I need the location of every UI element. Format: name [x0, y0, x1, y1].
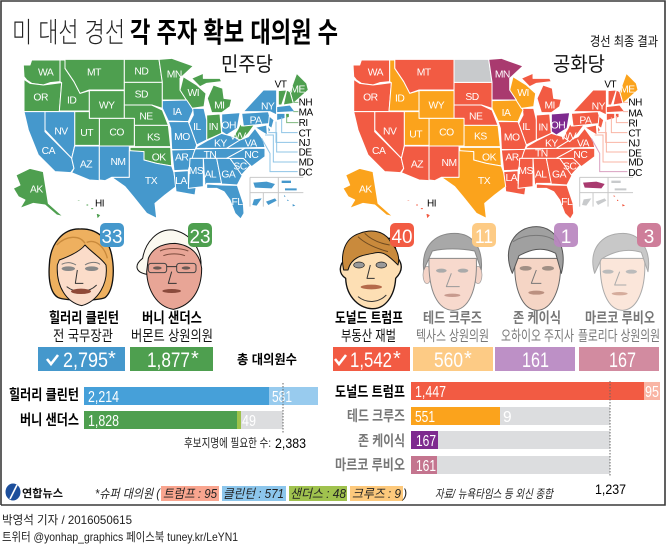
map: Democratic party: DE: [299, 148, 312, 159]
map: Democratic party: OK: [152, 153, 166, 164]
portrait: John Kasich: [508, 227, 563, 310]
map: Democratic party: AZ: [80, 159, 92, 170]
map: Democratic party: MS: [189, 166, 204, 177]
map: Republican party: MN: [495, 70, 510, 81]
bar chart: Democrats: 49: [242, 413, 256, 430]
legend: super delegates: 크루즈 : 9: [352, 487, 401, 501]
candidate names: 버니 샌더스: [142, 310, 202, 327]
title: [12, 17, 338, 48]
bar chart: Democrats: 2,383: [275, 436, 306, 451]
map: Democratic party: MO: [174, 132, 190, 143]
map: Republican party: [343, 58, 643, 219]
map: Democratic party: VT: [275, 79, 287, 90]
map: Republican party: VT: [604, 79, 617, 90]
bar chart: Republicans: 테드 크루즈: [347, 408, 405, 425]
map: Democratic party: MA: [299, 107, 313, 118]
bar chart: Democrats: 1,828: [88, 413, 119, 430]
map: Democratic party: IL: [193, 122, 202, 133]
label: total delegates: 총 대의원수: [237, 352, 297, 367]
map: Republican party: CT: [628, 129, 641, 140]
portrait: Marco Rubio: [593, 233, 649, 310]
map: Republican party: NE: [469, 111, 483, 122]
map: Republican party: SC: [563, 161, 577, 172]
legend: super delegates: *슈퍼 대의원 (: [95, 487, 162, 501]
map: Republican party: NM: [442, 158, 457, 169]
map: Republican party: AL: [535, 169, 547, 180]
bar chart: Republicans: 1,237: [595, 481, 626, 497]
map: Republican party: NH: [628, 98, 642, 109]
map: Democratic party: ME: [290, 85, 306, 96]
portrait: Hillary Clinton: [49, 229, 113, 306]
legend: super delegates: [95, 486, 407, 501]
map: Democratic party: NV: [54, 126, 68, 137]
map: Republican party: WY: [429, 100, 445, 111]
map: Democratic party: DC: [299, 167, 312, 178]
map: Republican party: RI: [628, 119, 637, 130]
map: Democratic party: VA: [245, 139, 257, 150]
map: Republican party: UT: [409, 130, 423, 141]
map: Democratic party: WV: [230, 131, 246, 142]
map: Republican party: ME: [620, 85, 635, 96]
map: Democratic party: CA: [42, 146, 56, 157]
total delegates: Clinton: *: [108, 348, 116, 370]
map: Democratic party: AK: [30, 185, 43, 196]
map: Republican party: MA: [628, 108, 643, 119]
total delegates: Clinton: 2,795: [63, 348, 108, 372]
map: Democratic party: NE: [139, 111, 153, 122]
map: Republican party: AK: [359, 185, 372, 196]
candidate names: 텍사스 상원의원: [416, 328, 489, 345]
map: Democratic party: KY: [214, 139, 227, 150]
badge: Clinton 33: 33: [102, 227, 122, 248]
map: Democratic party: CO: [109, 128, 124, 139]
map: Democratic party: ND: [134, 67, 148, 78]
bar chart: Republicans: 존 케이식: [358, 433, 405, 450]
map: Democratic party: MI: [214, 101, 225, 112]
map: Republican party: LA: [506, 173, 518, 184]
map: Democratic party: NM: [110, 157, 126, 168]
map: Democratic party: NJ: [299, 138, 310, 149]
map: Democratic party: AL: [205, 169, 217, 180]
map: Republican party: WI: [517, 88, 529, 99]
candidate names: 오하이오 주지사: [501, 328, 574, 345]
map: Republican party: NV: [383, 126, 397, 137]
candidate names: 부동산 재벌: [341, 328, 396, 345]
portrait: Donald Trump: [340, 231, 401, 309]
bar chart: Republicans: 167: [416, 433, 436, 450]
map: Democratic party: TN: [204, 150, 216, 161]
candidate names: [49, 310, 660, 345]
bar chart: Republicans: 마르코 루비오: [335, 457, 405, 474]
map: Republican party: OR: [363, 93, 378, 104]
bar chart: Republicans: 9: [503, 409, 512, 426]
badge: Sanders 23: 23: [190, 227, 210, 248]
map: Republican party: PA: [579, 115, 592, 126]
title: 미 대선 경선: [12, 17, 125, 48]
map: Democratic party: WI: [188, 88, 199, 99]
map: Republican party: IN: [538, 123, 548, 134]
map: Republican party: VA: [577, 139, 590, 150]
badge: Kasich 1: 1: [561, 227, 571, 248]
credit: 박영석 기자 / 2016050615: [2, 513, 132, 527]
bar chart: Democrats: 2,214: [88, 389, 119, 406]
heading: Democrats: 민주당: [221, 53, 273, 76]
map: Democratic party: CT: [299, 128, 311, 139]
heading: Republicans: 공화당: [553, 53, 605, 76]
map: Republican party: MI: [544, 101, 555, 112]
total delegates: Rubio: 167: [609, 348, 636, 372]
legend: super delegates: 클린턴 : 571: [223, 487, 284, 501]
badge: Cruz 11: 11: [475, 227, 493, 248]
map: Republican party: NJ: [628, 139, 640, 150]
bar chart: Democrats: 버니 샌더스: [20, 412, 79, 429]
map: Democratic party: KS: [147, 133, 160, 144]
legend: super delegates: 트럼프 : 95: [163, 487, 217, 501]
legend: super delegates: 샌더스 : 48: [290, 487, 346, 501]
candidate names: 존 케이식: [513, 310, 561, 327]
total delegates: Cruz: [413, 347, 493, 372]
map: Republican party: IL: [522, 122, 531, 133]
source: 자료/ 뉴욕타임스 등 외신 종합: [435, 487, 555, 501]
map: Republican party: WV: [561, 131, 577, 142]
map: Republican party: DC: [628, 168, 642, 179]
portrait: Bernie Sanders: [137, 230, 202, 309]
badge: Rubio 3: 3: [644, 227, 654, 248]
map: Republican party: TX: [478, 176, 491, 187]
bar chart: Republicans: 1,447: [415, 384, 446, 401]
total delegates: Rubio: [579, 347, 659, 372]
map: Republican party: IA: [502, 108, 511, 119]
total delegates: Sanders: 1,877: [147, 348, 190, 372]
map: Republican party: CO: [439, 128, 454, 139]
title: 각 주자 확보 대의원 수: [130, 17, 338, 48]
candidate names: 테드 크루즈: [423, 310, 482, 327]
map: Republican party: HI: [427, 198, 436, 209]
bar chart: Republicans: 도널드 트럼프: [335, 384, 405, 401]
map: Republican party: NY: [592, 101, 606, 112]
map: Republican party: KY: [545, 139, 558, 150]
map: Democratic party: [13, 58, 313, 219]
credit: [2, 513, 238, 544]
map: Democratic party: GA: [221, 170, 236, 181]
map: Democratic party: MT: [87, 68, 102, 79]
map: Republican party: CA: [372, 146, 386, 157]
map: Democratic party: PA: [250, 115, 262, 126]
map: Republican party: MT: [417, 68, 432, 79]
total delegates: Kasich: [495, 347, 575, 372]
total delegates: Trump: 1,542: [350, 348, 392, 372]
map: Republican party: WA: [368, 68, 384, 79]
map: Democratic party: IN: [209, 122, 218, 133]
map: Democratic party: LA: [175, 176, 187, 187]
map: Democratic party: WY: [99, 100, 115, 111]
total delegates: Kasich: 161: [522, 348, 549, 372]
total delegates: Trump: *: [393, 348, 401, 370]
map: Democratic party: NY: [261, 101, 275, 112]
map: Republican party: FL: [561, 197, 573, 208]
map: Republican party: NC: [573, 150, 588, 161]
bar chart: Republicans: 551: [415, 409, 435, 426]
map: Democratic party: TX: [145, 176, 158, 187]
map: Democratic party: UT: [80, 128, 94, 139]
map: Democratic party: FL: [231, 197, 243, 208]
map: Democratic party: MD: [299, 158, 313, 169]
map: Democratic party: ID: [67, 95, 76, 106]
map: Republican party: OH: [551, 120, 565, 131]
bar chart: Republicans: 95: [645, 384, 659, 401]
bar chart: Democrats: 힐러리 클린턴: [9, 387, 79, 404]
map: Democratic party: MN: [167, 70, 182, 81]
map: Republican party: MO: [504, 133, 520, 144]
badge: Cruz 11: [472, 223, 496, 248]
map: Republican party: AZ: [411, 159, 423, 170]
candidate names: 전 국무장관: [53, 328, 113, 345]
map: Democratic party: SD: [135, 89, 148, 100]
portrait: Ted Cruz: [423, 233, 482, 310]
logo: Yonhap News: [6, 484, 63, 500]
total delegates: Sanders: [130, 347, 213, 372]
logo: Yonhap News: 연합뉴스: [22, 486, 63, 500]
map: Democratic party: OR: [33, 93, 48, 104]
total delegates: Cruz: *: [464, 348, 472, 370]
bar chart: Republicans: 161: [416, 458, 436, 475]
map: Republican party: OK: [482, 153, 497, 164]
map: Democratic party: RI: [299, 118, 308, 129]
badge: Kasich 1: [554, 223, 578, 248]
candidate names: 버몬트 상원의원: [131, 328, 213, 345]
map: Republican party: AR: [505, 153, 519, 164]
total delegates: Clinton: [38, 347, 125, 372]
badge: Trump 40: 40: [392, 227, 412, 248]
map: Democratic party: HI: [95, 198, 104, 209]
map: Democratic party: OH: [221, 120, 236, 131]
total delegates: Cruz: 560: [434, 348, 463, 372]
bar chart: Republicans: [335, 381, 660, 497]
candidate names: 도널드 트럼프: [335, 310, 403, 327]
map: Republican party: KS: [474, 131, 487, 142]
map: Democratic party: NH: [299, 98, 312, 109]
total delegates: Sanders: *: [191, 348, 199, 370]
map: Republican party: MD: [628, 158, 643, 169]
map: Republican party: GA: [552, 170, 567, 181]
candidate names: 힐러리 클린턴: [49, 310, 119, 327]
bar chart: Democrats: [9, 383, 318, 451]
bar chart: Democrats: 581: [272, 389, 292, 406]
map: Republican party: MS: [518, 166, 534, 177]
credit: 트위터 @yonhap_graphics 페이스북 tuney.kr/LeYN1: [2, 530, 238, 544]
map: Democratic party: SC: [233, 161, 248, 172]
map: Republican party: DE: [628, 149, 642, 160]
badge: Rubio 3: [637, 223, 661, 248]
map: Democratic party: WA: [38, 68, 54, 79]
total delegates: Trump: [333, 347, 410, 372]
map: Democratic party: AR: [175, 153, 188, 164]
map: Republican party: SD: [465, 92, 479, 103]
map: Republican party: ID: [395, 94, 404, 105]
legend: super delegates: ): [401, 487, 407, 501]
map: Republican party: TN: [535, 149, 548, 160]
map: Democratic party: NC: [244, 150, 259, 161]
map: Democratic party: IA: [173, 107, 182, 118]
bar chart: Democrats: 후보지명에 필요한 수:: [184, 436, 271, 450]
